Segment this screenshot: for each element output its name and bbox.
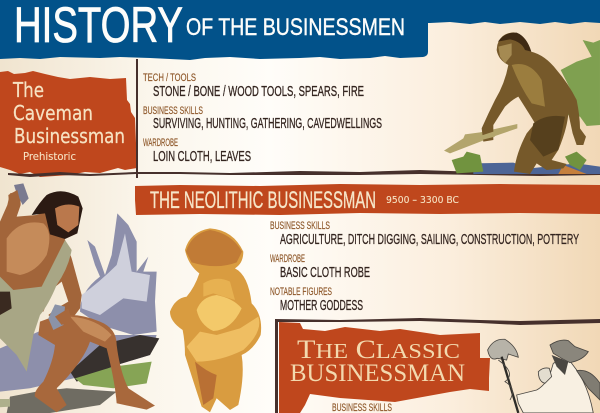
- panel: classic businessman title block: [279, 322, 490, 413]
- illustration: seated caveman holding stones: [0, 183, 159, 413]
- neolithic wardrobe text: BASIC CLOTH ROBE: [280, 264, 370, 281]
- illustration: Venus figurine mother goddess: [170, 228, 261, 412]
- panel: caveman title block: [0, 71, 137, 177]
- panel: neolithic banner: [135, 184, 600, 215]
- classic section dividers: [275, 318, 600, 413]
- hair and face: [32, 191, 83, 239]
- business skills text: SURVIVING, HUNTING, GATHERING, CAVEDWELLINGS: [153, 115, 382, 132]
- neolithic facts text: [270, 220, 579, 314]
- neolithic wardrobe heading: WARDROBE: [270, 253, 305, 265]
- notable figures heading: NOTABLE FIGURES: [270, 286, 332, 298]
- notable figures text: MOTHER GODDESS: [280, 297, 363, 314]
- neolithic heading: THE NEOLITHIC BUSINESSMAN: [150, 187, 376, 214]
- classic heading line 1: THE CLASSIC: [297, 335, 460, 364]
- header banner: [0, 0, 600, 60]
- caveman heading line 2: Caveman: [13, 101, 93, 125]
- illustration: Mercury with caduceus: [488, 339, 600, 413]
- caveman section dividers: [8, 59, 600, 178]
- caveman heading line 3: Businessman: [14, 124, 125, 148]
- hide garment: [0, 240, 72, 372]
- neolithic dates: 9500 – 3300 BC: [386, 195, 459, 206]
- tech heading: TECH / TOOLS: [143, 72, 196, 84]
- wardrobe heading: WARDROBE: [143, 137, 178, 149]
- classic heading line 2: BUSINESSMAN: [290, 360, 465, 387]
- illustration: walking caveman with tree: [444, 32, 600, 174]
- caveman facts text: [143, 72, 382, 165]
- hand-held stones: [14, 183, 29, 205]
- neolithic skills heading: BUSINESS SKILLS: [270, 220, 330, 232]
- wardrobe text: LOIN CLOTH, LEAVES: [153, 148, 251, 165]
- era label: Prehistoric: [23, 151, 76, 163]
- caveman heading: The: [12, 78, 44, 102]
- tech text: STONE / BONE / WOOD TOOLS, SPEARS, FIRE: [153, 83, 364, 100]
- legs: [35, 315, 155, 412]
- title: of the businessmen: OF THE BUSINESSMEN: [186, 14, 405, 41]
- raised arm and torso: [0, 191, 82, 325]
- business skills heading: BUSINESS SKILLS: [143, 105, 203, 117]
